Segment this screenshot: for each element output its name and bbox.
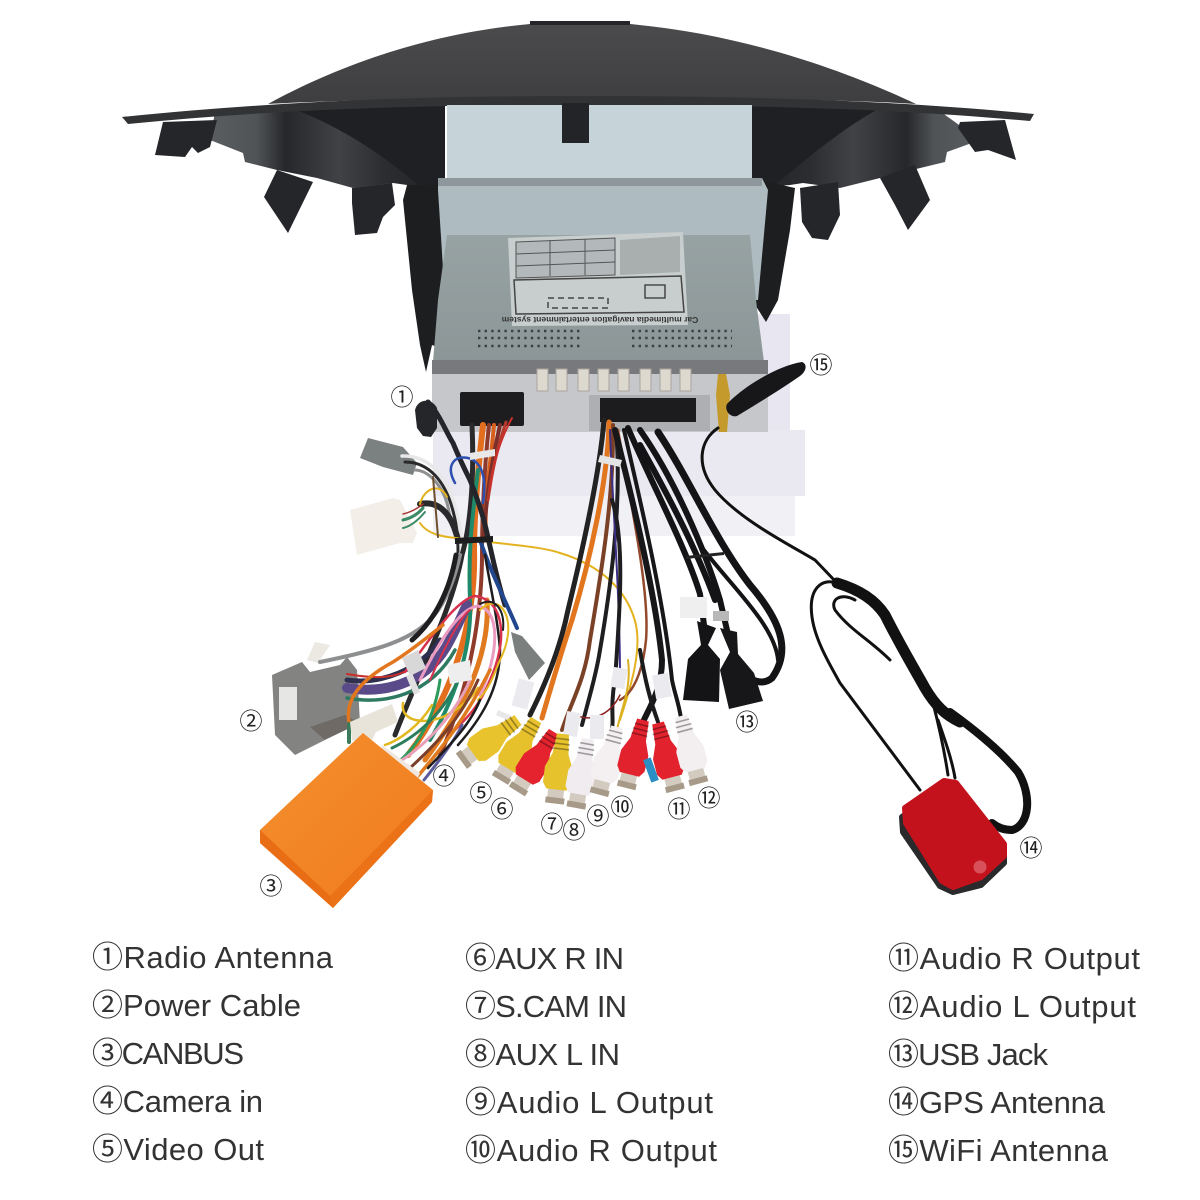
gray connector top-left bbox=[360, 438, 417, 475]
legend item 1: ①Radio Antenna bbox=[92, 940, 334, 975]
GPS red body bbox=[905, 781, 1004, 887]
left wire harness bbox=[320, 402, 637, 780]
brown stake bbox=[433, 477, 438, 537]
head unit main chassis bbox=[433, 232, 764, 362]
USB cable tie bbox=[686, 552, 724, 559]
yellow lower loop bbox=[403, 688, 478, 721]
legend item 12: ⑫Audio L Output bbox=[888, 989, 1136, 1024]
underside right wing bbox=[750, 100, 980, 188]
colored loops bbox=[405, 596, 501, 735]
legend item 8: ⑧AUX L IN bbox=[465, 1037, 620, 1072]
dashboard bezel bbox=[122, 21, 1034, 372]
RCA label tags bbox=[512, 667, 672, 739]
callout 1: ① bbox=[390, 384, 414, 410]
legend item 3: ③CANBUS bbox=[92, 1036, 244, 1071]
thick cable bundle bbox=[837, 583, 960, 722]
upper dark cavity left bbox=[290, 100, 445, 186]
can box white connector bbox=[378, 745, 420, 780]
right pillar bbox=[750, 178, 795, 322]
callout 11: ⑪ bbox=[668, 796, 690, 822]
callout 13: ⑬ bbox=[736, 709, 758, 735]
heat-sink fins bbox=[537, 369, 691, 391]
callout 14: ⑭ bbox=[1020, 835, 1042, 861]
callout numbers bbox=[240, 352, 1042, 899]
USB cables bbox=[628, 428, 782, 682]
callout 10: ⑩ bbox=[610, 794, 634, 820]
packaging boxes behind unit bbox=[433, 314, 805, 536]
yellow plug 5 bbox=[453, 709, 526, 772]
legend item 7: ⑦S.CAM IN bbox=[465, 989, 627, 1024]
yellow plug 6 bbox=[488, 713, 548, 787]
GPS dot bbox=[974, 860, 986, 874]
wifi gold connector bbox=[716, 374, 730, 432]
red plug 7 bbox=[505, 725, 566, 799]
right clips bbox=[800, 120, 1016, 240]
GPS base bbox=[902, 789, 1004, 892]
harness white RCA plug bbox=[350, 704, 398, 748]
red plug 11 bbox=[612, 717, 657, 791]
outer loop bbox=[950, 712, 1027, 830]
right wire bundle bbox=[530, 420, 681, 735]
legend column 2 bbox=[465, 941, 717, 1168]
left pillar bbox=[403, 185, 445, 372]
antenna lead bbox=[428, 402, 505, 605]
head unit upper chassis bbox=[438, 178, 768, 300]
callout 8: ⑧ bbox=[562, 817, 586, 843]
callout 6: ⑥ bbox=[490, 796, 514, 822]
yellow loop lead bbox=[420, 488, 447, 504]
USB plug left bbox=[683, 621, 720, 702]
USB plug right bbox=[720, 628, 763, 709]
left clips bbox=[155, 120, 395, 235]
legend item 11: ⑪Audio R Output bbox=[888, 941, 1140, 976]
callout 2: ② bbox=[240, 708, 262, 734]
yellow plug 8 bbox=[541, 732, 577, 805]
blue loop and lead bbox=[451, 457, 484, 503]
white plug 9 bbox=[562, 737, 602, 810]
wire bundle ties bbox=[598, 455, 622, 467]
top notch bbox=[530, 21, 630, 25]
red plug 12 bbox=[644, 719, 689, 794]
white connector bbox=[350, 498, 417, 555]
radio antenna plug bbox=[415, 401, 437, 437]
orange secondary bbox=[425, 600, 487, 760]
manual sheet: Car multimedia navigation entertainment system bbox=[501, 315, 698, 325]
top dome bbox=[268, 24, 916, 104]
wifi antenna bbox=[726, 362, 806, 416]
legend item 5: ⑤Video Out bbox=[92, 1132, 264, 1167]
main bundle bbox=[395, 425, 473, 735]
legend item 10: ⑩Audio R Output bbox=[465, 1133, 717, 1168]
wires from white connector bbox=[420, 503, 458, 540]
legend item 9: ⑨Audio L Output bbox=[465, 1085, 713, 1120]
legend column 1 bbox=[92, 940, 334, 1167]
inner cable loop bbox=[834, 597, 890, 660]
left socket bbox=[460, 392, 524, 426]
legend item 2: ②Power Cable bbox=[92, 988, 301, 1023]
bezel ledge bbox=[122, 96, 1034, 124]
underside dark core bbox=[210, 100, 445, 188]
screen back panel bbox=[447, 103, 752, 180]
vent holes bbox=[478, 331, 732, 346]
callout 5: ⑤ bbox=[470, 780, 492, 806]
legend item 4: ④Camera in bbox=[92, 1084, 263, 1119]
legend item 15: ⑮WiFi Antenna bbox=[888, 1133, 1109, 1168]
lower wires bbox=[320, 555, 460, 662]
right socket bbox=[589, 395, 710, 431]
callout 15: ⑮ bbox=[810, 352, 832, 378]
upper dark cavity right bbox=[750, 100, 880, 186]
legend item 6: ⑥AUX R IN bbox=[465, 941, 624, 976]
wires into can box bbox=[395, 680, 440, 765]
legend item 14: ⑭GPS Antenna bbox=[888, 1085, 1106, 1120]
legend item 13: ⑬USB Jack bbox=[888, 1037, 1048, 1072]
GPS cable and antenna bbox=[702, 428, 1027, 892]
thin antenna lead bbox=[702, 428, 920, 790]
power connector wire mass bbox=[347, 605, 467, 690]
callout 9: ⑨ bbox=[586, 803, 610, 829]
orange CANBUS box bbox=[260, 733, 433, 908]
callout 12: ⑫ bbox=[698, 785, 720, 811]
callout 3: ③ bbox=[260, 873, 282, 899]
white plug 10 bbox=[585, 723, 631, 798]
harness cable ties and tags bbox=[402, 449, 512, 721]
USB jack labels bbox=[680, 597, 729, 621]
gray power connector bbox=[272, 642, 360, 755]
lower cables to body bbox=[933, 703, 948, 775]
wires from gray connector bbox=[402, 456, 462, 552]
blue fuse bbox=[643, 757, 659, 783]
white plug 13 bbox=[667, 712, 713, 787]
callout 7: ⑦ bbox=[540, 811, 564, 837]
legend column 3 bbox=[888, 941, 1140, 1168]
manual sheet bbox=[501, 232, 698, 326]
callout 4: ④ bbox=[432, 763, 456, 789]
head unit rear panel bbox=[432, 360, 768, 432]
gray inline connector bbox=[511, 632, 545, 680]
orange wire to can box bbox=[348, 625, 443, 722]
RCA plugs bbox=[453, 709, 713, 810]
